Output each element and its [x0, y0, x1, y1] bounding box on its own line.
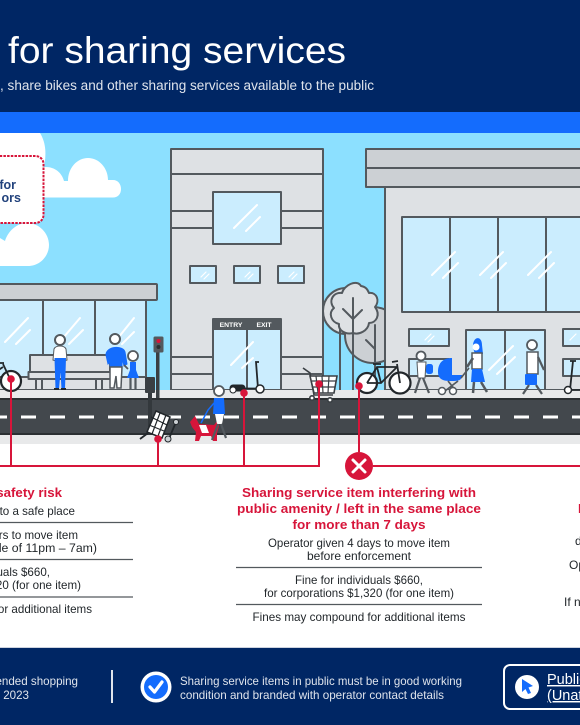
header banner: [0, 0, 580, 112]
clouds: [0, 133, 121, 266]
heading: [237, 485, 481, 532]
building: right: [366, 149, 580, 390]
subtitle: , share bikes and other sharing services available to the public: [0, 78, 374, 93]
icon: cursor: [515, 675, 539, 699]
guide dog: [190, 416, 219, 441]
trees: [323, 283, 401, 390]
person: child with backpack: [415, 352, 433, 393]
bench: [0, 355, 146, 390]
sky: [0, 133, 580, 391]
icon: red cross: [345, 452, 373, 480]
footer note: shopping trolleys: [0, 675, 78, 702]
lower kerb: [0, 435, 580, 444]
person: woman pushing pram: [467, 338, 487, 393]
blue band: [0, 112, 580, 133]
person: man with bag: [523, 340, 544, 394]
footer note: item condition: condition and branded with operator contact details: [180, 689, 444, 702]
panel: public amenity rules: [236, 485, 482, 624]
sidewalk: [0, 390, 580, 398]
bike left: [0, 363, 21, 391]
traffic light: [145, 336, 164, 435]
heading: for more than 7 days: [292, 517, 426, 532]
person: man holding child: [106, 334, 128, 388]
footer note: item condition: [180, 675, 462, 702]
door sign: entry and exit: [220, 322, 272, 329]
callout: for operators: ors: [2, 191, 21, 205]
panel: public amenity rules: Fine for individuals $660,: [295, 573, 423, 587]
person walking with guide dog: [190, 386, 226, 441]
scooter centre: [230, 362, 264, 393]
road: [0, 398, 580, 435]
callout: for operators: [0, 156, 44, 223]
red connector lines: [0, 375, 580, 480]
bus shelter: [0, 284, 157, 390]
panel: public amenity rules: Operator given 4 days to move item: [268, 536, 450, 550]
footer note: shopping trolleys: 2023: [3, 689, 29, 702]
building: centre: [171, 149, 323, 390]
panel: public amenity rules: for corporations $1,320 (for one item): [264, 586, 454, 600]
heading: public amenity / left in the same place: [237, 501, 481, 516]
bike centre: [357, 361, 410, 394]
icon: check mark: [140, 672, 172, 702]
pram: [438, 358, 469, 394]
heading: Sharing service item interfering with: [242, 485, 476, 500]
footer: [0, 647, 580, 725]
shopping cart: [303, 368, 337, 402]
title: for sharing services: [8, 30, 346, 71]
person: woman at bench: [53, 335, 67, 389]
divider: [111, 670, 113, 703]
door sign: entry and exit: ENTRY: [220, 322, 243, 329]
person: child: [127, 351, 139, 389]
hand truck with parcels: [140, 411, 178, 442]
street scene illustration: [0, 133, 580, 444]
link button: [504, 665, 580, 709]
panel: safety risk rules: to a safe place: [0, 505, 75, 518]
panel: right column rules: [564, 501, 580, 609]
panel: public amenity rules: Fines may compound for additional items: [252, 610, 466, 624]
panel: public amenity rules: before enforcement: [307, 549, 412, 563]
door sign: entry and exit: EXIT: [256, 322, 272, 329]
panel: safety risk rules: [0, 485, 133, 616]
footer note: item condition: Sharing service items in public must be in good working: [180, 675, 462, 688]
scooter right: [564, 361, 580, 394]
